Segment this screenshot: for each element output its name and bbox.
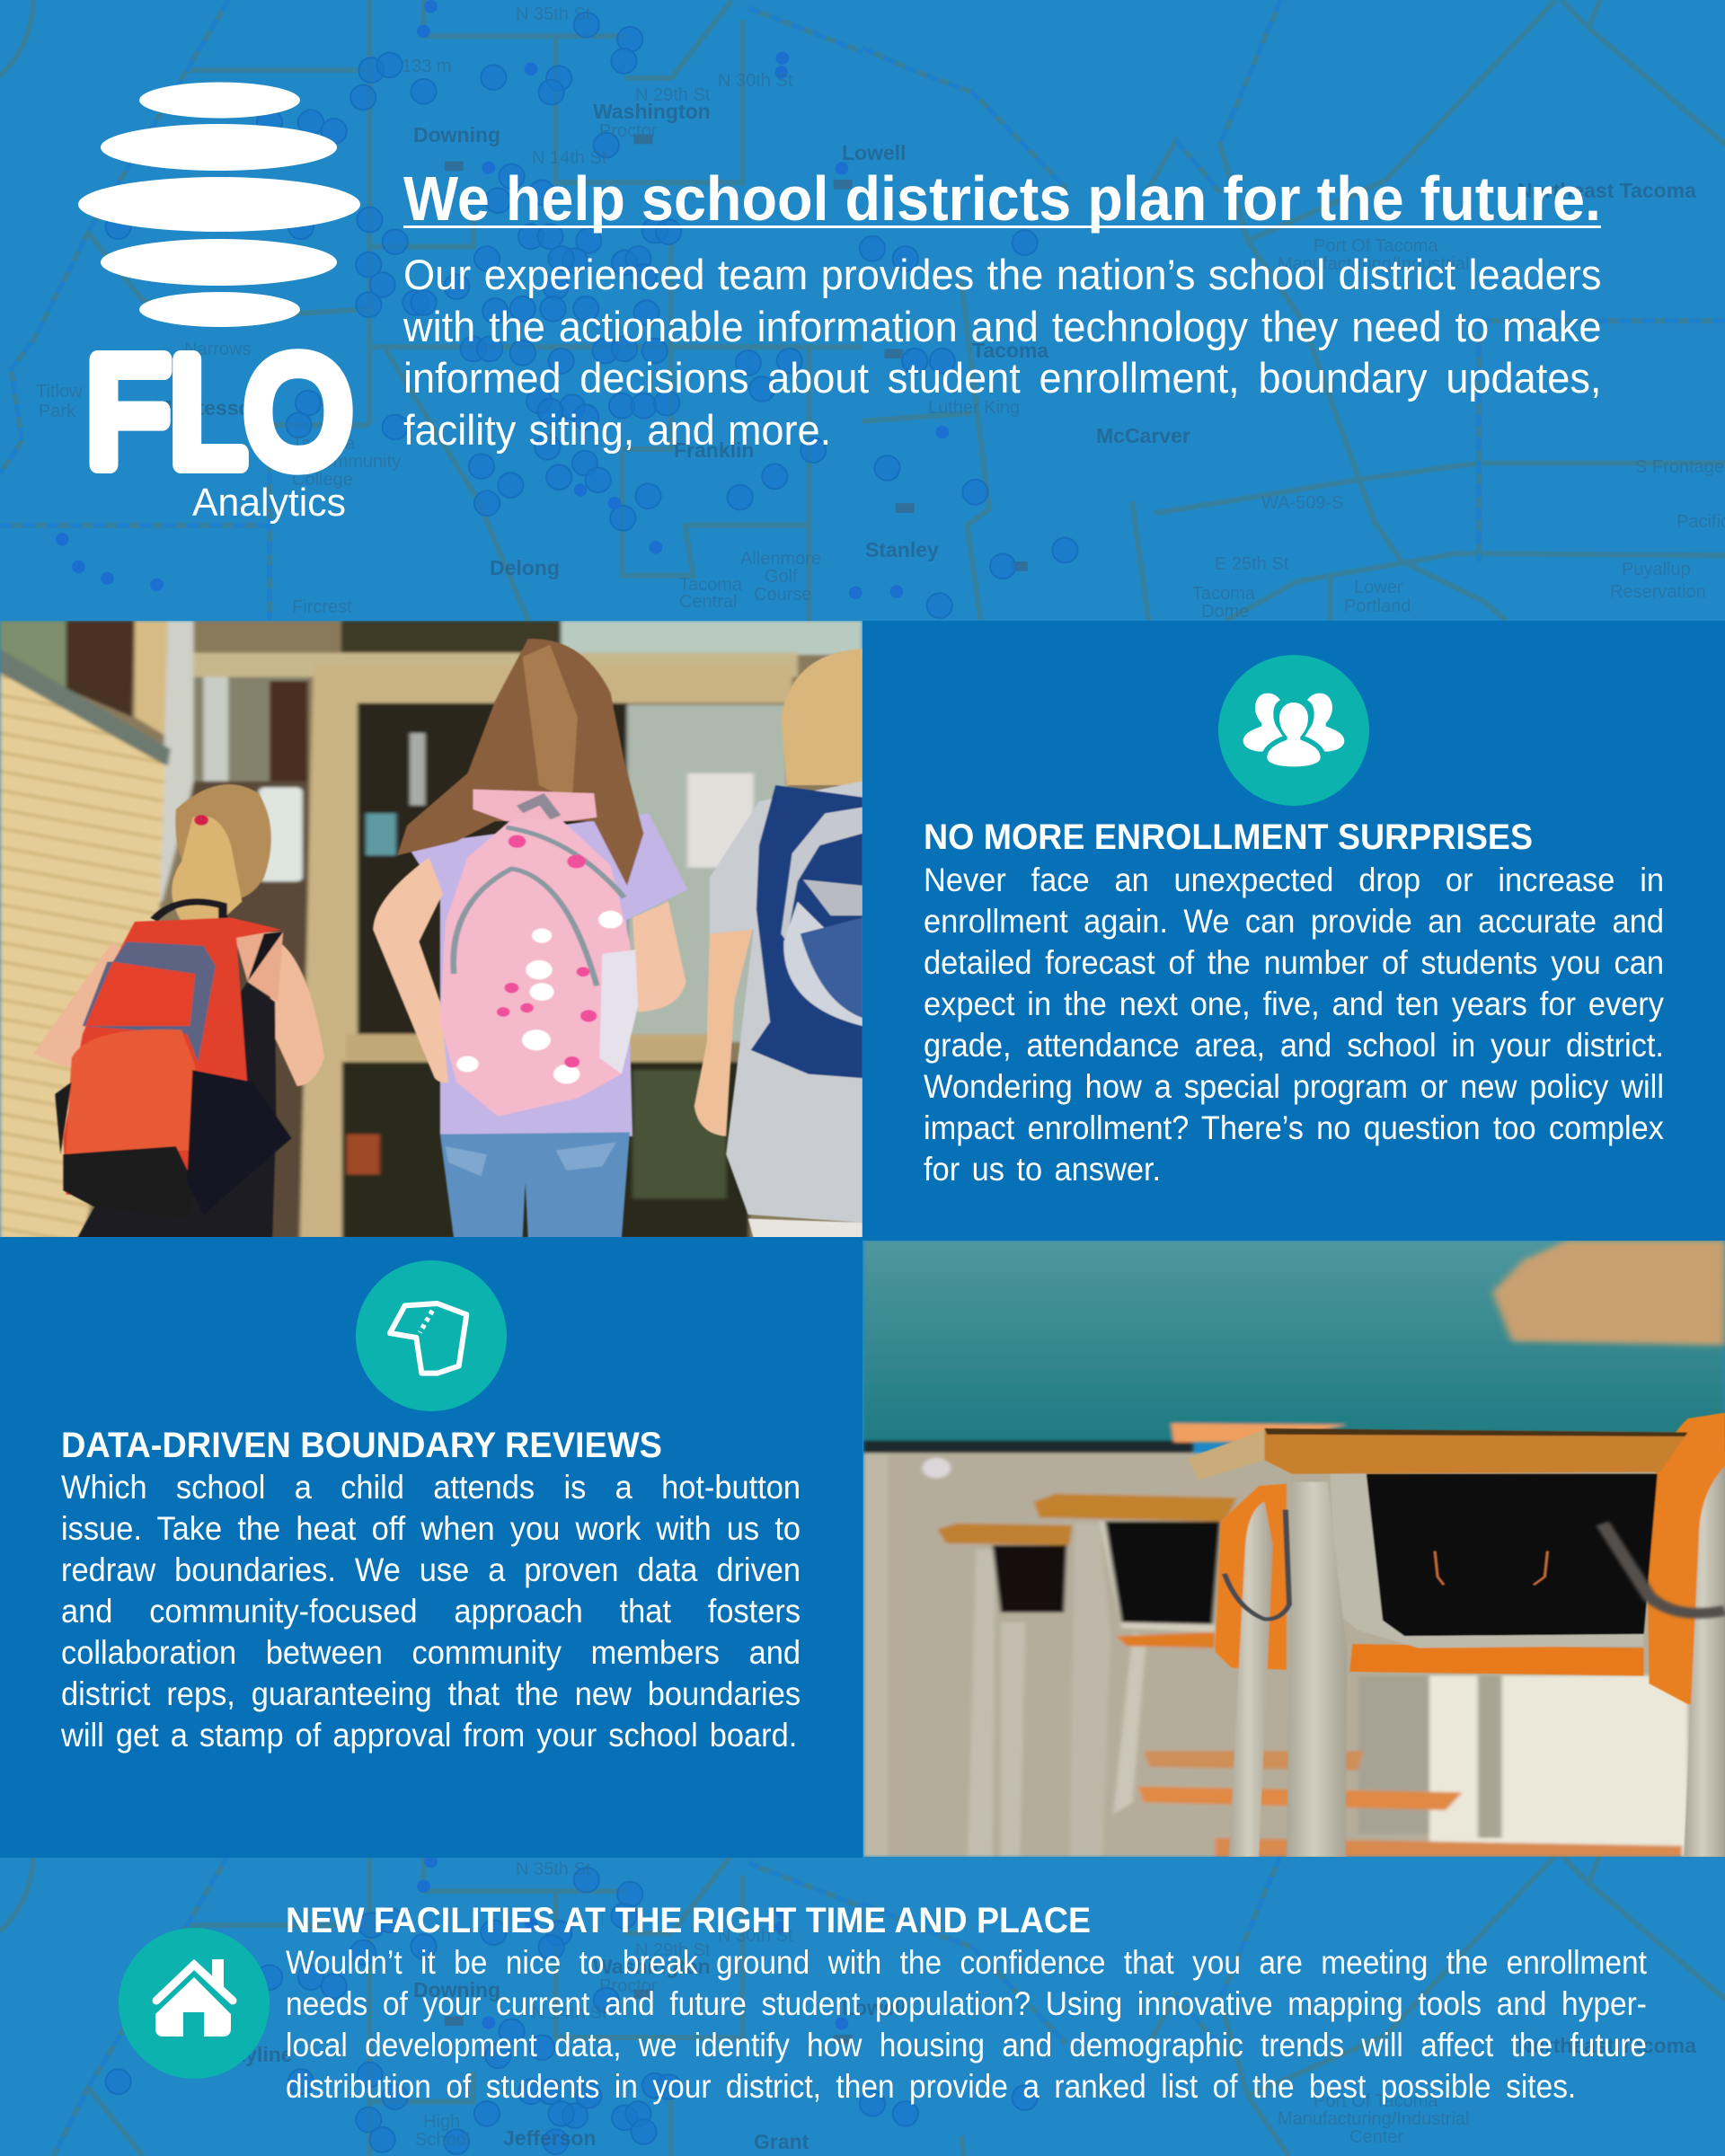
map labels: top band: Northeast Tacoma (1517, 179, 1696, 202)
text block: boundary reviews body: will get a stamp of approval from your school board. (61, 1717, 797, 1754)
map labels: top band: 133 m (402, 57, 452, 76)
heading: no more enrollment surprises: NO MORE ENROLLMENT SURPRISES (924, 817, 1533, 857)
map labels: top band: Park (39, 402, 76, 421)
text block: enrollment surprises body (924, 862, 1664, 1188)
photo: children with backpacks walking to school (0, 621, 862, 1239)
map labels: top band: Tacoma (292, 434, 356, 454)
map labels: top band: McCarver (1096, 424, 1190, 447)
map labels: bottom band: N 14th St (532, 2003, 607, 2023)
photo: classroom desks in a row (863, 1241, 1725, 1857)
map labels: top band: College (292, 470, 353, 490)
panel: no more enrollment surprises background (862, 621, 1725, 1241)
map labels: top band: Stanley (865, 538, 939, 561)
map labels: bottom band: Downing (413, 1978, 500, 2001)
text block: new facilities body: needs of your current and future student population? Using innovative mapping tools and hyper- (286, 1985, 1647, 2022)
map labels: top band: N 35th St (516, 4, 591, 24)
text block: boundary reviews body: district reps, guaranteeing that the new boundaries (61, 1675, 801, 1712)
icon: people group (1218, 655, 1369, 806)
map labels: top band: Fircrest (292, 597, 352, 617)
map labels: bottom band: Grant (754, 2130, 809, 2153)
map labels: top band: Portland (1344, 596, 1411, 616)
map labels: top band: Community (310, 452, 401, 472)
text block: enrollment surprises body: impact enrollment? There’s no question too complex (924, 1109, 1664, 1146)
map labels: top band: Allenmore (740, 549, 821, 569)
map labels: top band: Narrows (184, 340, 251, 359)
map labels: top band: Puyallup (1622, 560, 1691, 579)
text block: enrollment surprises body: expect in the next one, five, and ten years for every (924, 985, 1664, 1022)
text block: boundary reviews body: issue. Take the heat off when you work with us to (61, 1510, 801, 1547)
logo wordmark: Analytics: Analytics (192, 481, 346, 525)
map labels: top band: Manufacturing/Industrial (1278, 254, 1469, 274)
map labels: bottom band: Manufacturing/Industrial (1278, 2109, 1469, 2129)
middle girl (373, 639, 687, 1239)
map labels: bottom band: Center (1349, 2127, 1403, 2147)
map labels: bottom band: School (415, 2130, 470, 2150)
map labels: top band: Port Of Tacoma (1314, 236, 1438, 256)
map labels: bottom band: Washington (593, 1955, 711, 1978)
map labels: top band: N 29th St (635, 85, 711, 105)
text block: hero intro: facility siting, and more. (403, 406, 831, 453)
text block: enrollment surprises body: for us to answer. (924, 1151, 1161, 1188)
map labels: bottom band (220, 1860, 1696, 2153)
map labels: top band: Titlow (36, 382, 83, 402)
text block: boundary reviews body: Which school a child attends is a hot-button (61, 1469, 801, 1506)
text block: new facilities body (286, 1944, 1647, 2105)
left girl (33, 784, 324, 1239)
text block: new facilities body: local development data, we identify how housing and demographic trends will affect the future (286, 2027, 1647, 2063)
map labels: top band: Lower (1354, 578, 1403, 597)
map labels: top band: Tiger Montessori (99, 396, 265, 420)
map labels: bottom band: N 29th St (635, 1940, 711, 1960)
text block: enrollment surprises body: Wondering how a special program or new policy will (924, 1068, 1664, 1105)
map labels: bottom band: Jefferson (503, 2126, 597, 2150)
map labels: top band: Tacoma (972, 339, 1048, 362)
text block: boundary reviews body: collaboration between community members and (61, 1634, 801, 1671)
logo wordmark: FLO: FLO (86, 327, 351, 498)
map labels: bottom band: N 30th St (718, 1926, 793, 1946)
map labels: top band: Luther King (928, 398, 1020, 418)
map labels: top band: S Frontage (1635, 457, 1724, 477)
map labels: bottom band: Port Of Tacoma (1314, 2091, 1438, 2111)
text block: enrollment surprises body: grade, attendance area, and school in your district. (924, 1027, 1664, 1064)
panel: bottom map background (0, 1855, 1725, 2156)
map labels: bottom band: Lowell (842, 1996, 907, 2019)
map labels: top band: Lowell (842, 141, 907, 164)
map labels: top band: Tacoma (679, 575, 743, 595)
map labels: top band (36, 4, 1725, 622)
text block: hero intro: informed decisions about student enrollment, boundary updates, (403, 354, 1601, 402)
map labels: top band: Downing (413, 123, 500, 146)
text block: enrollment surprises body: enrollment again. We can provide an accurate and (924, 903, 1664, 940)
map labels: top band: Course (754, 585, 811, 605)
text block: boundary reviews body: and community-focused approach that fosters (61, 1593, 801, 1630)
right girl (694, 649, 862, 1239)
map labels: top band: Dome (1201, 602, 1249, 622)
map labels: top band: Golf (765, 567, 798, 587)
text block: boundary reviews body: redraw boundaries. We use a proven data driven (61, 1551, 801, 1588)
map labels: bottom band: Proctor (599, 1976, 658, 1996)
text block: enrollment surprises body: Never face an unexpected drop or increase in (924, 862, 1664, 898)
map labels: top band: WA-509-S (1261, 493, 1344, 513)
heading: data-driven boundary reviews: DATA-DRIVEN BOUNDARY REVIEWS (61, 1426, 662, 1465)
map labels: top band: Reservation (1610, 582, 1706, 602)
panel: data-driven boundary reviews background (0, 1237, 862, 1858)
text block: boundary reviews body (61, 1469, 801, 1754)
map labels: top band: Proctor (599, 121, 658, 141)
text block: new facilities body: distribution of students in your district, then provide a ranked list of the best possible sites. (286, 2068, 1576, 2105)
text block: new facilities body: Wouldn’t it be nice to break ground with the confidence that you are meeting the enrollment (286, 1944, 1647, 1981)
map labels: top band: N 14th St (532, 148, 607, 168)
title: We help school districts plan for the future. (403, 163, 1601, 234)
icon: house (119, 1928, 270, 2079)
logo mark: stacked discs (78, 83, 360, 327)
map labels: top band: Central (679, 592, 737, 612)
text block: hero intro: Our experienced team provides the nation’s school district leaders (403, 251, 1601, 298)
map labels: bottom band: Skyline (220, 2043, 293, 2066)
map labels: bottom band: Northeast Tacoma (1517, 2034, 1696, 2057)
panel: top map background (0, 0, 1725, 621)
text block: hero intro (402, 251, 1601, 454)
map labels: top band: Tacoma (1192, 584, 1256, 604)
map labels: top band: E 25th St (1215, 554, 1289, 574)
map labels: top band: Franklin (674, 438, 754, 462)
map labels: top band: Washington (593, 100, 711, 123)
map labels: bottom band: N 35th St (516, 1860, 591, 1879)
map labels: top band: Delong (490, 556, 560, 579)
map labels: top band: N 30th St (718, 71, 793, 91)
icon: boundary map (356, 1260, 507, 1411)
text block: enrollment surprises body: detailed forecast of the number of students you can (924, 944, 1664, 981)
heading: new facilities: NEW FACILITIES AT THE RIGHT TIME AND PLACE (286, 1901, 1091, 1940)
map labels: bottom band: High (423, 2112, 460, 2132)
text block: hero intro: with the actionable information and technology they need to make (403, 302, 1601, 350)
